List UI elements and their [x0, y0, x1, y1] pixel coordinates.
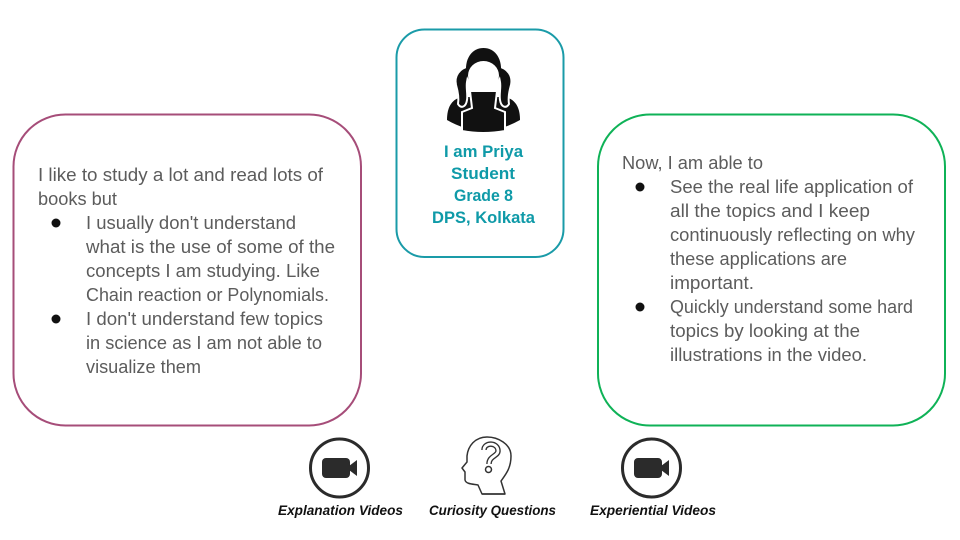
icon: experiential video camera: [622, 439, 680, 497]
bullet: quick understanding: [636, 297, 913, 365]
bullet: visualizing topics: visualize them: [86, 357, 201, 377]
text block: profile details: DPS, Kolkata: [432, 208, 536, 227]
icon: explanation video camera: [310, 439, 368, 497]
bullet: real life application: See the real life application of: [670, 177, 914, 197]
bullet: real life application: [636, 177, 915, 293]
bullet: visualizing topics: I don't understand few topics: [86, 309, 323, 329]
text block: profile details: Student: [451, 164, 515, 183]
bullet: visualizing topics: [52, 309, 323, 377]
bullet: real life application: important.: [670, 273, 754, 293]
bullet: understanding use: what is the use of some of the: [85, 237, 335, 257]
caption: experiential videos: Experiential Videos: [590, 502, 716, 518]
icon: student girl: [447, 48, 520, 133]
bullet: real life application: continuously reflecting on why: [670, 225, 915, 245]
panel: profile: [396, 30, 564, 257]
text block: profile details: [432, 142, 536, 227]
bullet: visualizing topics: in science as I am not able to: [86, 333, 322, 353]
panel: after: [598, 114, 945, 426]
text block: after intro: Now, I am able to: [622, 153, 763, 173]
bullet: quick understanding: illustrations in the video.: [670, 345, 867, 365]
bullet: real life application: all the topics and I keep: [670, 201, 870, 221]
bullet: quick understanding: Quickly understand some hard: [670, 297, 913, 317]
bullet: understanding use: I usually don't understand: [86, 213, 296, 233]
text block: before intro: I like to study a lot and read lots of: [38, 165, 324, 185]
bullet: understanding use: concepts I am studying. Like: [86, 261, 320, 281]
text block: before intro: books but: [38, 189, 117, 209]
panel: before: [14, 114, 361, 426]
text block: before intro: [38, 165, 324, 209]
text block: profile details: Grade 8: [454, 186, 513, 205]
caption: explanation videos: Explanation Videos: [278, 502, 403, 518]
text block: profile details: I am Priya: [444, 142, 524, 161]
bullet: quick understanding: topics by looking at the: [670, 321, 860, 341]
icon: head with question mark: [462, 437, 511, 494]
caption: curiosity questions: Curiosity Questions: [429, 502, 556, 518]
bullet: understanding use: [52, 213, 335, 305]
bullet: real life application: these applications are: [670, 249, 847, 269]
bullet: understanding use: Chain reaction or Polynomials.: [86, 285, 329, 305]
